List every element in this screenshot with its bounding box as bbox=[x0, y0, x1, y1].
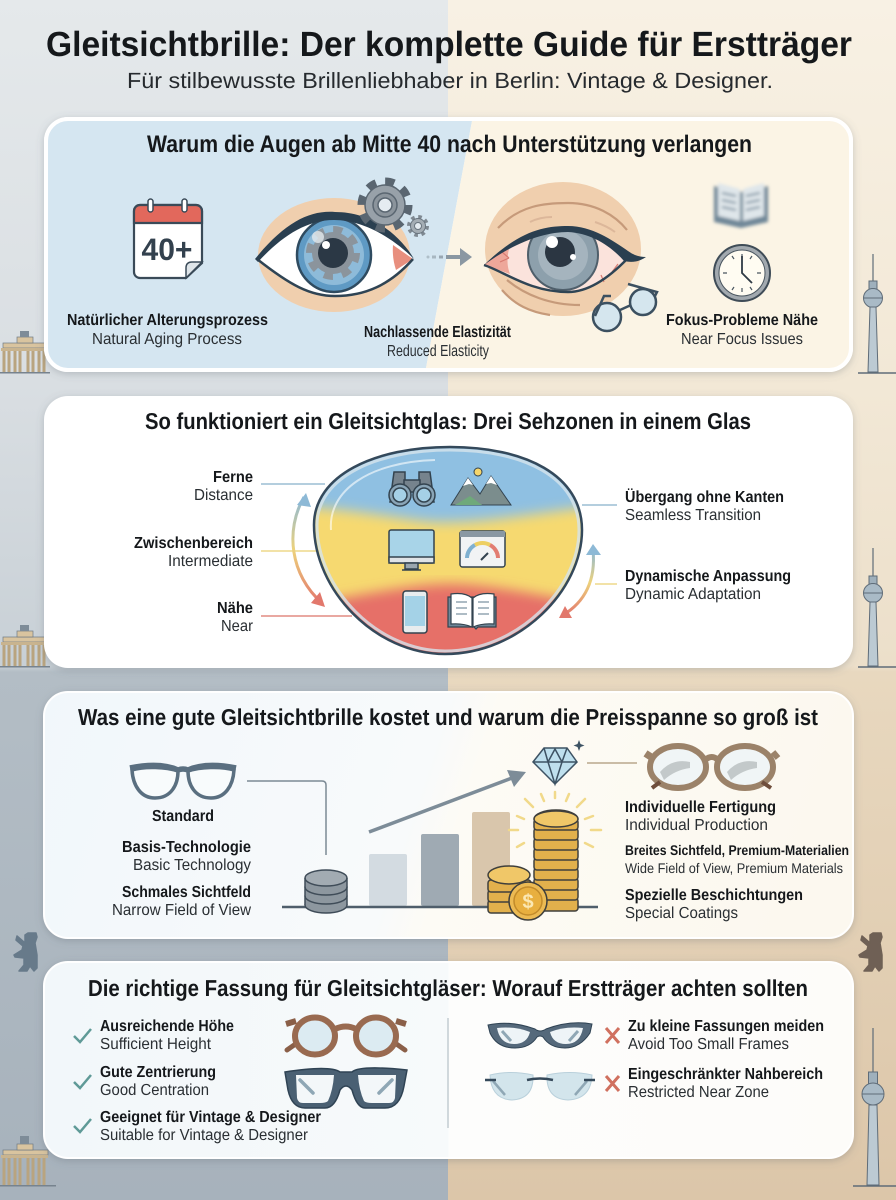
text: Standard: Standard bbox=[152, 808, 214, 825]
text: Basis-Technologie: Basic Technology bbox=[133, 857, 251, 874]
text: Schmales Sichtfeld: Narrow Field of View bbox=[112, 902, 251, 919]
text: Nachlassende Elastizität: Nachlassende Elastizität bbox=[364, 324, 512, 341]
decoration: Brandenburg Gate bottom bbox=[0, 1136, 56, 1186]
icon: mountains bbox=[451, 468, 511, 505]
heading: Was eine gute Gleitsichtbrille kostet und warum die Preisspanne so groß ist bbox=[78, 704, 818, 730]
icon: Berlin bear right bbox=[859, 933, 882, 971]
text: Spezielle Beschichtungen bbox=[625, 887, 803, 922]
icon: x mark bbox=[606, 1076, 619, 1091]
heading: Die richtige Fassung für Gleitsichtgläser: Worauf Erstträger achten sollten bbox=[88, 975, 808, 1001]
icon: binoculars bbox=[389, 472, 435, 506]
text: Basis-Technologie: Basis-Technologie bbox=[122, 839, 251, 856]
text: Schmales Sichtfeld bbox=[112, 884, 251, 919]
icon: aging eye with glasses bbox=[484, 182, 657, 331]
check item: Ausreichende Höhe: Sufficient Height bbox=[100, 1036, 212, 1053]
text: Eingeschränkter Nahbereich: Restricted Near Zone bbox=[628, 1084, 769, 1101]
icon: blurred book bbox=[714, 183, 768, 228]
icon: x mark bbox=[606, 1028, 619, 1043]
icon: rimless glasses bbox=[485, 1072, 595, 1100]
text: Breites Sichtfeld bbox=[625, 842, 849, 876]
text: Individuelle Fertigung: Individuelle Fertigung bbox=[625, 799, 776, 816]
check item: Gute Zentrierung: Good Centration bbox=[100, 1082, 209, 1099]
label: Nähe bbox=[217, 600, 254, 635]
connector line bbox=[247, 781, 326, 855]
panel: richtige Fassung bbox=[44, 962, 853, 1158]
text: Spezielle Beschichtungen: Spezielle Beschichtungen bbox=[625, 887, 803, 904]
arrow: left cycle bbox=[293, 493, 325, 607]
title: Gleitsichtbrille: Der komplette Guide für Erstträger bbox=[46, 25, 852, 64]
divider bbox=[447, 1018, 449, 1128]
icon: standard glasses bbox=[130, 765, 236, 798]
check item: Geeignet: Suitable for Vintage & Designer bbox=[100, 1127, 309, 1144]
text: Natürlicher Alterungsprozess bbox=[67, 312, 268, 348]
icon: calendar 40+ bbox=[134, 199, 202, 278]
label: Dynamische Anpassung: Dynamische Anpassung bbox=[625, 568, 791, 585]
text: Nachlassende Elastizität: Reduced Elasticity bbox=[387, 343, 489, 360]
panel: Gleitsichtglas bbox=[44, 396, 853, 670]
icon: open book bbox=[448, 594, 496, 629]
icon: tortoise glasses bbox=[646, 746, 778, 788]
check item: Ausreichende Höhe bbox=[74, 1018, 234, 1053]
text: Natürlicher Alterungsprozess: Natural Aging Process bbox=[92, 331, 242, 348]
icon: phone bbox=[403, 591, 427, 633]
arrow: price increase bbox=[369, 770, 526, 832]
text: Fokus-Probleme Nähe: Near Focus Issues bbox=[681, 331, 803, 348]
decoration: TV tower top bbox=[858, 254, 896, 373]
icon: sparkle bbox=[574, 740, 584, 751]
text: Schmales Sichtfeld: Schmales Sichtfeld bbox=[122, 884, 251, 901]
icon: diamond bbox=[533, 748, 577, 784]
label: Übergang ohne Kanten bbox=[625, 488, 784, 524]
check item: Geeignet bbox=[74, 1109, 321, 1144]
heading: So funktioniert ein Gleitsichtglas: Drei Sehzonen in einem Glas bbox=[145, 408, 751, 434]
check item: Gute Zentrierung: Gute Zentrierung bbox=[100, 1064, 216, 1081]
label: Nähe: Near bbox=[221, 618, 254, 635]
icon: navy square glasses bbox=[285, 1068, 407, 1108]
text: Natürlicher Alterungsprozess: Natürlicher Alterungsprozess bbox=[67, 312, 268, 329]
text: Nachlassende Elastizität bbox=[364, 324, 512, 360]
bar chart bbox=[282, 812, 598, 907]
label: Ferne: Distance bbox=[194, 487, 253, 504]
label: Dynamische Anpassung: Dynamic Adaptation bbox=[625, 586, 761, 603]
text: Breites Sichtfeld: Wide Field of View, Premium Materials bbox=[625, 860, 843, 876]
check item: Gute Zentrierung bbox=[74, 1064, 216, 1099]
text: Zu kleine Fassungen meiden bbox=[628, 1018, 824, 1053]
decoration: TV tower bottom bbox=[853, 1028, 896, 1186]
text: Basis-Technologie bbox=[122, 839, 251, 874]
check item: Geeignet: Geeignet für Vintage & Designer bbox=[100, 1109, 321, 1126]
text: Eingeschränkter Nahbereich bbox=[628, 1066, 823, 1101]
leader lines right bbox=[582, 505, 617, 584]
subtitle: Für stilbewusste Brillenliebhaber in Berlin: Vintage & Designer. bbox=[127, 68, 773, 93]
label: Ferne bbox=[194, 469, 253, 504]
label: Zwischenbereich: Zwischenbereich bbox=[134, 535, 253, 552]
text: Breites Sichtfeld: Breites Sichtfeld, Premium-Materialien bbox=[625, 842, 849, 858]
label: Zwischenbereich bbox=[134, 535, 253, 570]
text: Eingeschränkter Nahbereich: Eingeschränkter Nahbereich bbox=[628, 1066, 823, 1083]
decoration: Brandenburg Gate top bbox=[0, 331, 50, 374]
label: Übergang ohne Kanten: Seamless Transition bbox=[625, 507, 761, 524]
decoration: Brandenburg Gate middle bbox=[0, 625, 50, 668]
icon: gold coin stacks: $ bbox=[522, 891, 534, 913]
icon: calendar 40+: 40+ bbox=[142, 232, 192, 267]
icon: healthy eye with gears bbox=[255, 182, 427, 312]
icon: silver coins bbox=[305, 870, 347, 913]
text: Individuelle Fertigung bbox=[625, 799, 776, 834]
icon: gold coin stacks bbox=[488, 810, 578, 920]
arrow: eye transition bbox=[426, 248, 472, 266]
check list bbox=[74, 1018, 321, 1144]
icon: Berlin bear left bbox=[14, 933, 37, 971]
lens bbox=[312, 446, 584, 656]
label: Nähe: Nähe bbox=[217, 600, 253, 617]
panel: Preisspanne bbox=[44, 692, 853, 938]
text: Zu kleine Fassungen meiden: Avoid Too Small Frames bbox=[628, 1036, 789, 1053]
icon: monitor bbox=[389, 530, 434, 570]
text: Individuelle Fertigung: Individual Production bbox=[625, 817, 768, 834]
label: Übergang ohne Kanten: Übergang ohne Kanten bbox=[625, 488, 784, 506]
label: Ferne: Ferne bbox=[213, 469, 253, 486]
arrow: right cycle bbox=[559, 544, 601, 618]
decoration: TV tower middle bbox=[858, 548, 896, 667]
icon: gauge bbox=[460, 531, 505, 567]
icon: small frame glasses bbox=[488, 1023, 592, 1048]
connector line bbox=[587, 762, 637, 764]
label: Dynamische Anpassung bbox=[625, 568, 791, 603]
check item: Ausreichende Höhe: Ausreichende Höhe bbox=[100, 1018, 234, 1035]
leader lines left bbox=[261, 484, 352, 616]
panel: warum die Augen bbox=[44, 117, 853, 372]
heading: Warum die Augen ab Mitte 40 nach Unterstützung verlangen bbox=[147, 131, 752, 158]
icon: brown round glasses bbox=[286, 1018, 406, 1054]
text: Fokus-Probleme Nähe: Fokus-Probleme Nähe bbox=[666, 312, 818, 329]
icon: clock bbox=[714, 245, 770, 301]
label: Zwischenbereich: Intermediate bbox=[168, 553, 253, 570]
text: Zu kleine Fassungen meiden: Zu kleine Fassungen meiden bbox=[628, 1018, 824, 1035]
text: Fokus-Probleme Nähe bbox=[666, 312, 818, 348]
text: Spezielle Beschichtungen: Special Coatings bbox=[625, 905, 738, 922]
icon: sparkle rays bbox=[509, 792, 601, 847]
